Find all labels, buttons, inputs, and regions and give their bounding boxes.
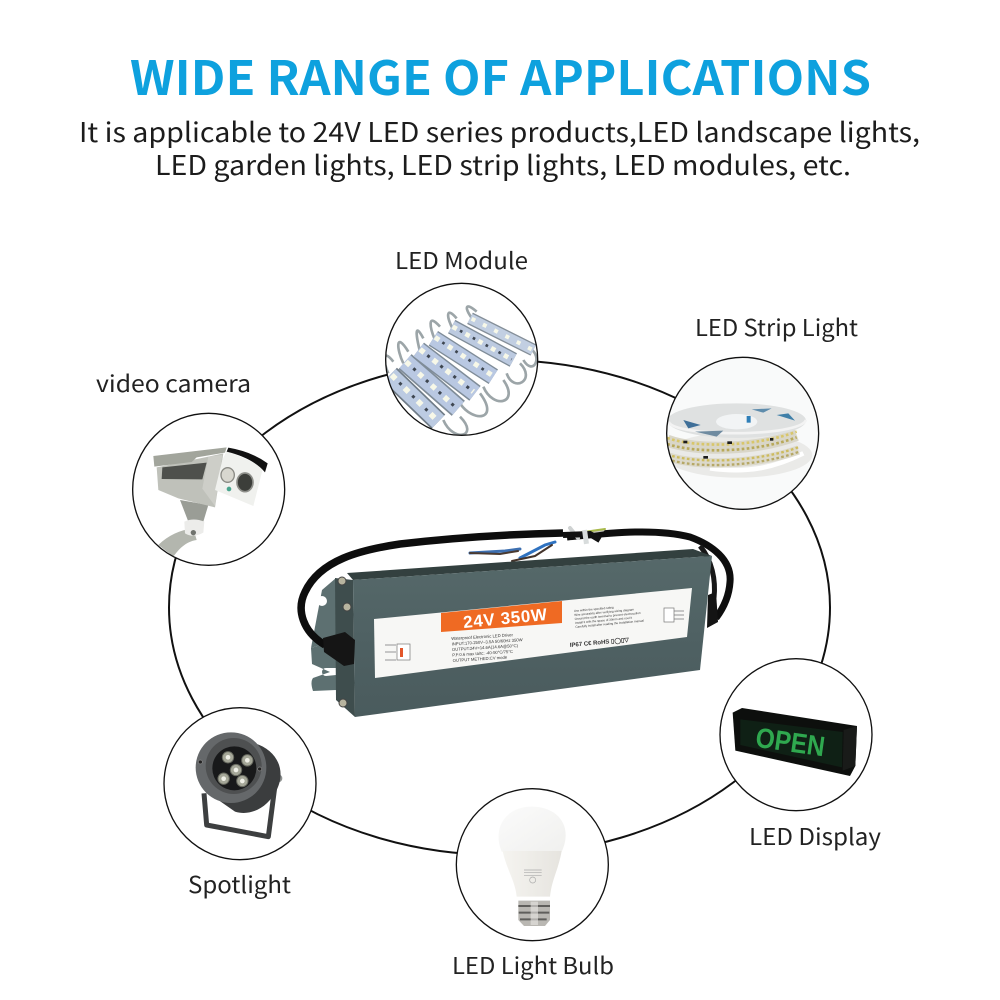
strip coils <box>667 450 798 463</box>
module bars <box>390 318 533 422</box>
strip reel windows <box>683 420 701 428</box>
camera body <box>157 453 223 507</box>
display panel <box>740 719 843 767</box>
camera front <box>215 451 263 506</box>
bulb neck <box>503 851 562 897</box>
label: Spotlight: Spotlight <box>188 866 291 900</box>
driver notes: Use within the specified rating <box>574 605 614 613</box>
spotlight front ring <box>196 732 266 803</box>
circle: LED Display <box>720 659 872 811</box>
driver notes: Ground the earth terminal to prevent electrocution <box>574 611 641 621</box>
spotlight LEDs <box>218 752 253 787</box>
label: LED Strip Light: LED Strip Light <box>695 309 858 343</box>
driver left flange <box>335 578 355 717</box>
label: LED Light Bulb: LED Light Bulb <box>452 947 614 981</box>
driver specifications: INPUT:170-250V~3.5A 50/60Hz 350W <box>451 637 523 647</box>
camera sunshade <box>153 447 227 467</box>
driver specifications: P.F:0.6 max ta/tc: -40-50°C/75°C <box>452 649 513 657</box>
driver notes <box>574 603 644 629</box>
strip chips <box>683 438 773 459</box>
label: LED Module: LED Module <box>395 242 528 276</box>
title: WIDE RANGE OF APPLICATIONS <box>130 40 871 109</box>
camera arm <box>158 528 197 557</box>
driver right gland <box>707 592 718 628</box>
driver notes: Install it with the space of 30mm and cool it <box>575 616 632 625</box>
driver mounting tabs <box>311 640 336 691</box>
spotlight bracket <box>204 780 276 837</box>
spotlight housing back <box>218 743 281 813</box>
camera lens <box>221 468 234 482</box>
module LEDs <box>392 319 532 420</box>
circle: Spotlight <box>164 708 316 860</box>
circle: LED Light Bulb <box>456 789 608 941</box>
spotlight screws <box>198 760 262 771</box>
bulb base <box>518 901 550 926</box>
camera window <box>162 463 207 479</box>
module wire loops <box>385 306 536 435</box>
product: LED driver <box>301 528 730 717</box>
label: video camera: video camera <box>96 365 251 399</box>
driver screws <box>338 577 351 707</box>
bulb print <box>524 870 542 875</box>
driver back cable <box>567 532 730 618</box>
driver notes: Wire accurately after verifying wiring diagram <box>574 607 635 617</box>
driver specifications: OUTPUT METHED:CV mode <box>452 655 508 663</box>
driver front face <box>353 556 712 717</box>
spotlight lens well <box>212 746 256 790</box>
strip lower reel <box>664 432 812 478</box>
driver rating: 24V 350W <box>462 605 549 632</box>
driver notes: Carefully install after reading the installation manual <box>575 619 644 629</box>
driver specifications <box>451 632 524 663</box>
driver certification: IP67 C€ RoHS ▯◯▯▽ <box>570 637 630 649</box>
driver specifications: OUTPUT:24V=14.6A(14.6A@50°C) <box>452 643 519 652</box>
circle: video camera <box>133 413 285 565</box>
subtitle <box>79 111 920 183</box>
OPEN message: OPEN <box>754 722 827 762</box>
label: LED Display: LED Display <box>749 818 881 852</box>
camera bracket <box>180 500 208 522</box>
driver top face <box>347 549 712 580</box>
driver cable gland <box>323 632 355 666</box>
circle: LED Strip Light <box>664 357 819 509</box>
display side <box>843 726 857 771</box>
module chips <box>399 331 512 420</box>
bulb dome <box>499 807 566 852</box>
driver wires <box>470 528 605 561</box>
subtitle: It is applicable to 24V LED series products,LED landscape lights, <box>79 111 920 150</box>
driver front cable <box>301 533 563 645</box>
driver specifications: Waterproof Electronic LED Driver <box>451 632 514 641</box>
display case <box>733 708 857 776</box>
driver label <box>374 588 692 678</box>
driver orange band <box>441 601 562 632</box>
driver wiring diagrams <box>385 608 684 660</box>
subtitle: LED garden lights, LED strip lights, LED modules, etc. <box>155 144 851 183</box>
circle: LED Module <box>385 283 538 435</box>
connecting ring <box>169 360 830 855</box>
strip upper reel <box>667 403 806 438</box>
